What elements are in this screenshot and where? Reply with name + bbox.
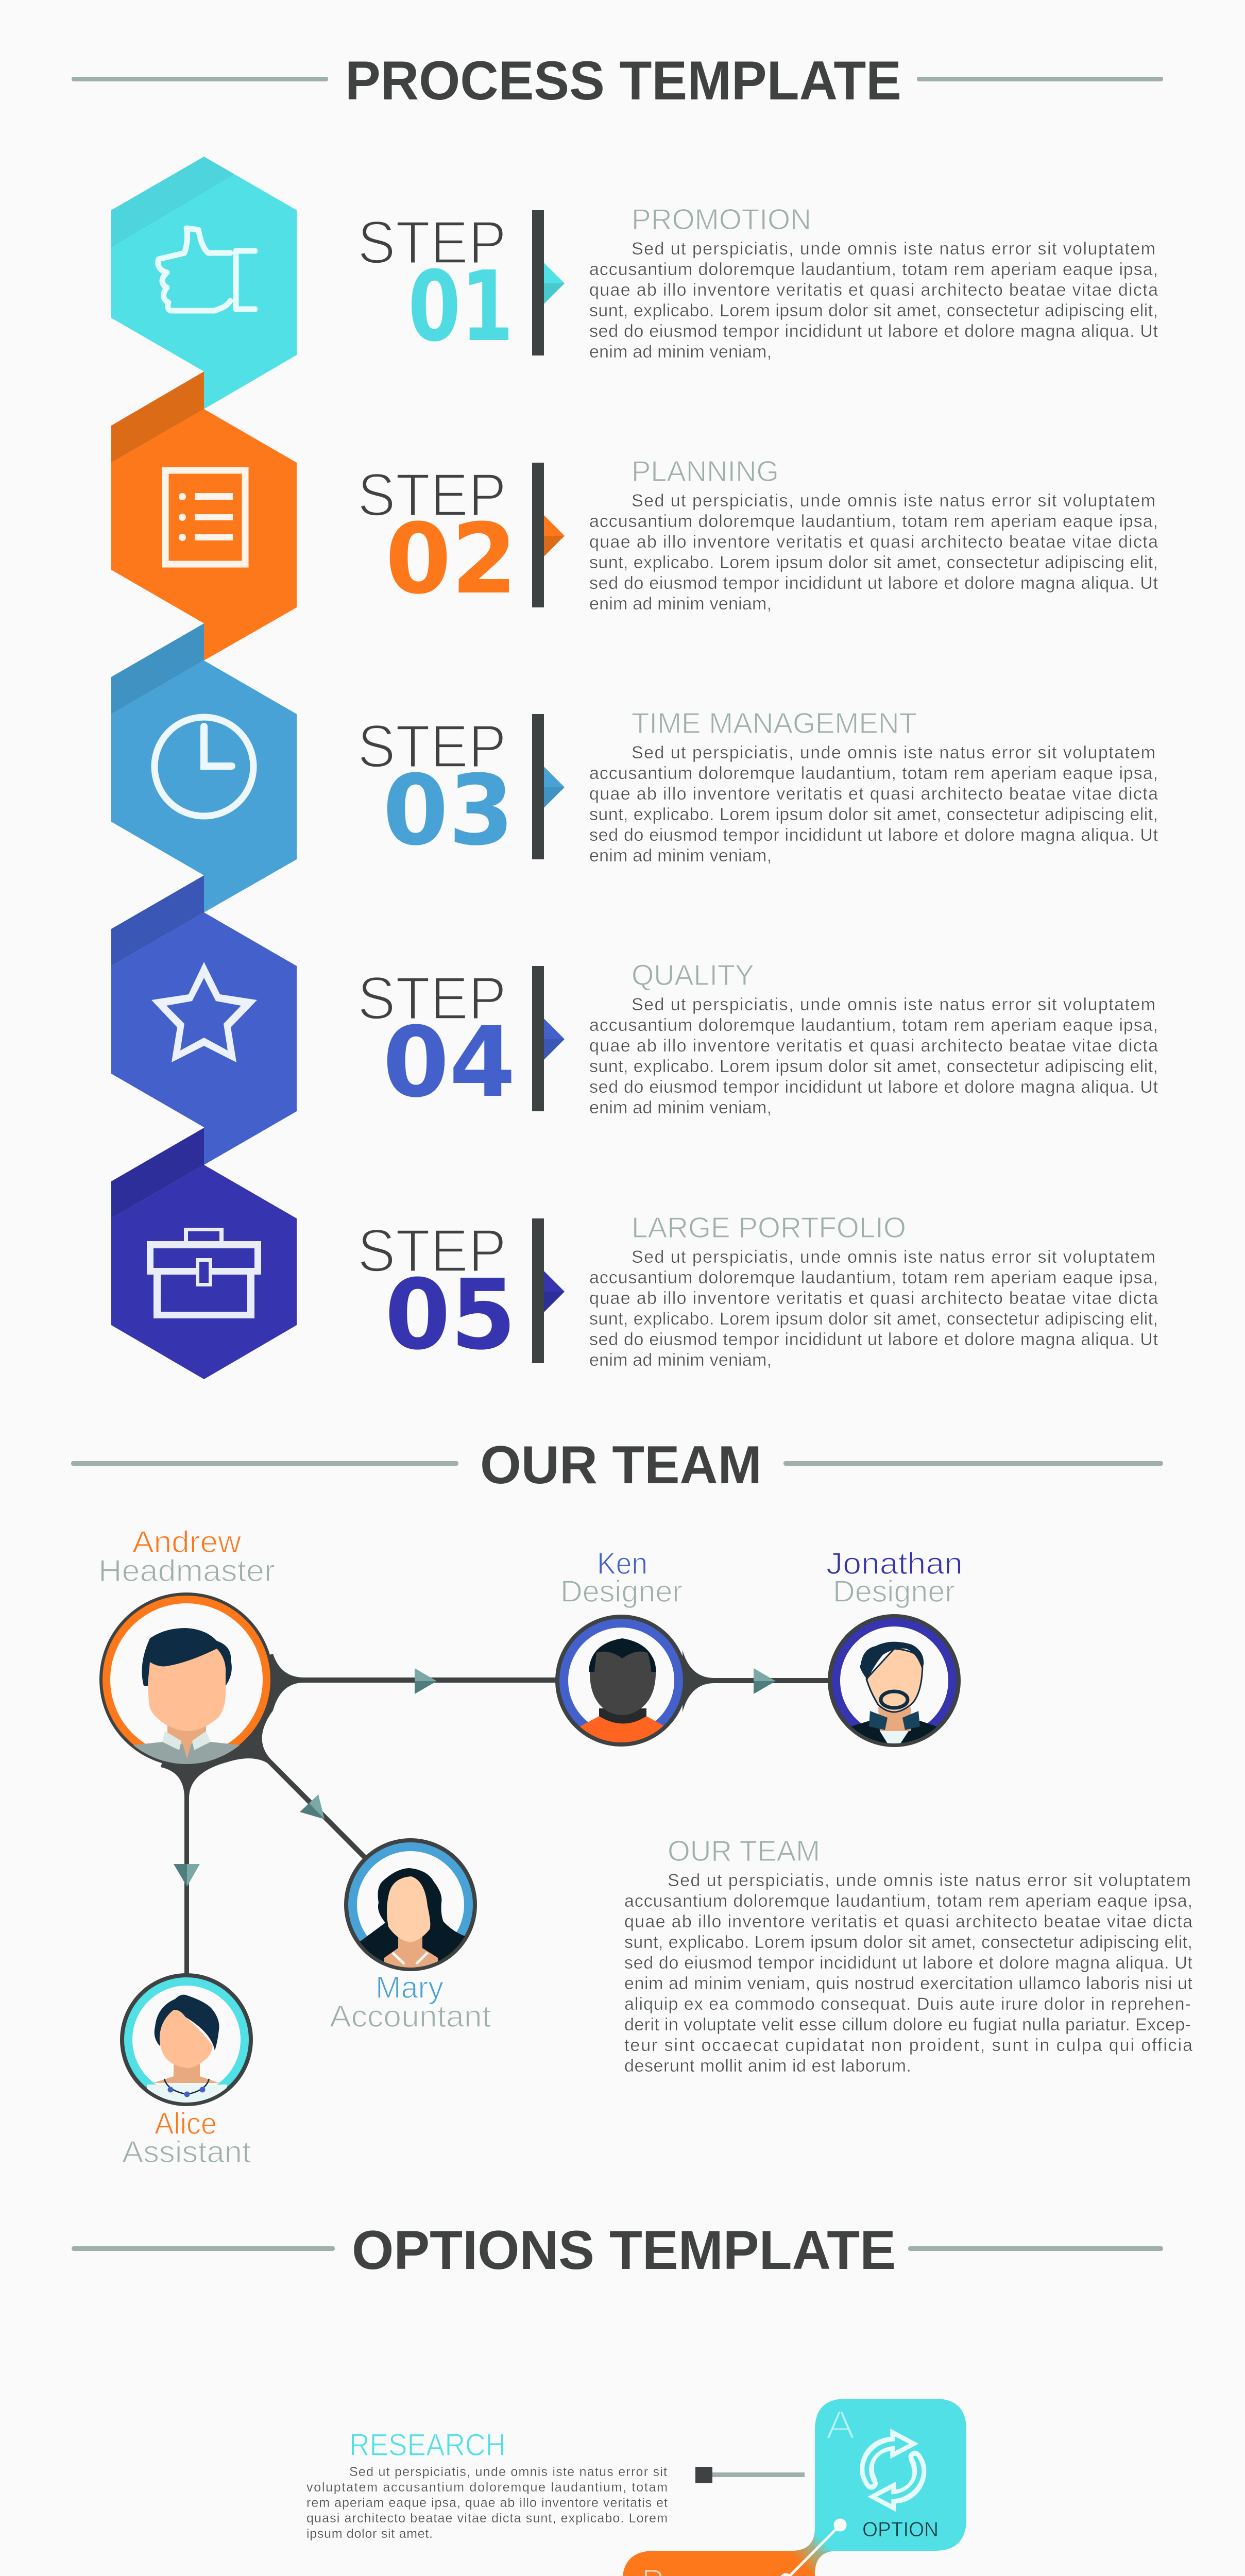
label: Alice, Assistant: Assistant (122, 2135, 251, 2169)
panel: step 1 label (357, 209, 565, 363)
panel: option A: OPTION (862, 2518, 939, 2541)
label: Mary, Accountant: Accountant (330, 1999, 491, 2033)
text block: research: Sed ut perspiciatis, unde omnis iste natus error sit (349, 2465, 667, 2479)
arrow: Andrew to Mary (300, 1794, 325, 1819)
text block: our team (624, 1835, 1193, 2076)
label: Jonathan, Designer (826, 1547, 963, 1608)
text block: quality (589, 959, 1158, 1117)
connector: A to B pins (780, 2518, 847, 2576)
text block: our team: aliquip ex ea commodo consequat. Duis aute irure dolor in reprehen- (624, 1994, 1191, 2014)
panel: step 2 hexagon (111, 371, 297, 660)
text block: quality: QUALITY (632, 959, 754, 992)
text block: research (306, 2428, 668, 2541)
label: Mary, Accountant (330, 1971, 491, 2033)
text block: planning: sunt, explicabo. Lorem ipsum dolor sit amet, consectetur adipiscing elit, (589, 553, 1158, 572)
heading: process template: PROCESS TEMPLATE (345, 49, 901, 111)
junction fillets between option cards (377, 2528, 838, 2576)
text block: planning: Sed ut perspiciatis, unde omnis iste natus error sit voluptatem (632, 491, 1155, 511)
text block: our team: accusantium doloremque laudantium, totam rem aperiam eaque ipsa, (624, 1891, 1192, 1911)
text block: large portfolio: accusantium doloremque laudantium, totam rem aperiam eaque ipsa, (589, 1268, 1158, 1287)
heading: options template (72, 2219, 1163, 2281)
avatar: Mary (344, 1838, 477, 1973)
label: Alice, Assistant: Alice (155, 2107, 217, 2141)
panel: step 4 label (357, 964, 565, 1119)
text block: promotion: PROMOTION (632, 203, 811, 236)
label: Andrew, Headmaster: Andrew (132, 1525, 241, 1559)
panel: option B (622, 2551, 815, 2576)
text block: our team: deserunt mollit anim id est laborum. (624, 2056, 911, 2076)
text block: large portfolio: LARGE PORTFOLIO (632, 1211, 906, 1244)
text block: time management: quae ab illo inventore veritatis et quasi architecto beatae vitae dicta (589, 784, 1158, 804)
text block: time management: TIME MANAGEMENT (632, 707, 917, 740)
icon: checklist document (165, 470, 245, 564)
heading: process template (72, 49, 1163, 111)
text block: promotion: sunt, explicabo. Lorem ipsum dolor sit amet, consectetur adipiscing elit, (589, 301, 1158, 320)
text block: our team: Sed ut perspiciatis, unde omnis iste natus error sit voluptatem (668, 1871, 1191, 1890)
text block: time management (589, 707, 1158, 866)
text block: promotion: sed do eiusmod tempor incididunt ut labore et dolore magna aliqua. Ut (589, 321, 1158, 341)
text block: large portfolio: sed do eiusmod tempor incididunt ut labore et dolore magna aliqua. Ut (589, 1330, 1158, 1349)
label: Mary, Accountant: Mary (376, 1971, 444, 2005)
arrow: Andrew to Ken (415, 1668, 437, 1694)
label: Andrew, Headmaster: Headmaster (98, 1554, 275, 1588)
text block: quality: accusantium doloremque laudantium, totam rem aperiam eaque ipsa, (589, 1015, 1158, 1035)
text block: our team: teur sint occaecat cupidatat non proident, sunt in culpa qui officia (624, 2036, 1192, 2055)
text block: promotion: enim ad minim veniam, (589, 342, 772, 362)
text block: research: rem aperiam eaque ipsa, quae ab illo inventore veritatis et (306, 2496, 668, 2510)
text block: time management: accusantium doloremque laudantium, totam rem aperiam eaque ipsa, (589, 764, 1158, 783)
panel: step 3 label: STEP (357, 713, 506, 781)
panel: step 5 hexagon (111, 1128, 297, 1379)
panel: step 3 hexagon (111, 623, 297, 912)
panel: step 5 label: 05 (385, 1259, 516, 1371)
label: Alice, Assistant (122, 2107, 251, 2169)
heading: our team: OUR TEAM (480, 1435, 762, 1495)
label: Jonathan, Designer: Jonathan (826, 1547, 963, 1581)
panel: step 2 label (357, 461, 565, 616)
text block: time management: sed do eiusmod tempor incididunt ut labore et dolore magna aliqua. Ut (589, 825, 1158, 845)
text block: large portfolio: enim ad minim veniam, (589, 1350, 772, 1370)
text block: our team: OUR TEAM (668, 1835, 820, 1868)
text block: large portfolio: sunt, explicabo. Lorem ipsum dolor sit amet, consectetur adipiscing elit, (589, 1309, 1158, 1329)
text block: our team: quae ab illo inventore veritatis et quasi architecto beatae vitae dicta (624, 1912, 1192, 1931)
text block: promotion (589, 203, 1158, 362)
panel: step 4 label: STEP (357, 964, 506, 1032)
text block: large portfolio: quae ab illo inventore veritatis et quasi architecto beatae vitae dicta (589, 1289, 1158, 1308)
connectors: org chart lines (161, 1650, 832, 1976)
text block: large portfolio (589, 1211, 1158, 1370)
text block: quality: quae ab illo inventore veritatis et quasi architecto beatae vitae dicta (589, 1036, 1158, 1056)
text block: quality: sunt, explicabo. Lorem ipsum dolor sit amet, consectetur adipiscing elit, (589, 1057, 1158, 1076)
icon: star (151, 962, 257, 1062)
arrow: Andrew to Alice (174, 1864, 200, 1887)
text block: time management: sunt, explicabo. Lorem ipsum dolor sit amet, consectetur adipiscing elit, (589, 805, 1158, 824)
text block: our team: sunt, explicabo. Lorem ipsum dolor sit amet, consectetur adipiscing elit, (624, 1933, 1192, 1952)
text block: promotion: Sed ut perspiciatis, unde omnis iste natus error sit voluptatem (632, 239, 1155, 259)
panel: step 3 label: 03 (383, 754, 514, 867)
text block: research: RESEARCH (349, 2428, 506, 2462)
avatar: Alice (120, 1973, 253, 2112)
heading: our team (71, 1435, 1163, 1495)
panel: option A: A (826, 2402, 855, 2447)
avatar: Ken (555, 1615, 687, 1752)
label: Jonathan, Designer: Designer (833, 1574, 955, 1608)
panel: step 1 label: 01 (408, 250, 514, 363)
label: Ken, Designer (560, 1547, 683, 1608)
text block: research: voluptatem accusantium doloremque laudantium, totam (306, 2480, 668, 2495)
label: Andrew, Headmaster (98, 1525, 275, 1588)
text block: time management: enim ad minim veniam, (589, 846, 772, 866)
text block: quality: sed do eiusmod tempor incididunt ut labore et dolore magna aliqua. Ut (589, 1077, 1158, 1097)
text block: quality: Sed ut perspiciatis, unde omnis iste natus error sit voluptatem (632, 995, 1155, 1014)
icon: refresh arrows (860, 2429, 926, 2512)
panel: step 2 label: STEP (357, 461, 506, 529)
text block: planning: quae ab illo inventore veritatis et quasi architecto beatae vitae dicta (589, 532, 1158, 552)
heading: options template: OPTIONS TEMPLATE (352, 2219, 896, 2281)
text block: planning: sed do eiusmod tempor incididunt ut labore et dolore magna aliqua. Ut (589, 573, 1158, 593)
panel: step 4 hexagon (111, 875, 297, 1165)
panel: step 5 label (357, 1217, 565, 1371)
panel: step 1 hexagon (111, 157, 297, 409)
text block: planning: PLANNING (632, 455, 779, 488)
text block: time management: Sed ut perspiciatis, unde omnis iste natus error sit voluptatem (632, 743, 1155, 762)
text block: planning (589, 455, 1158, 614)
text block: our team: sed do eiusmod tempor incididunt ut labore et dolore magna aliqua. Ut (624, 1953, 1193, 1973)
icon: thumbs up (158, 228, 255, 311)
label: Ken, Designer: Designer (560, 1574, 683, 1608)
label: Ken, Designer: Ken (597, 1547, 647, 1581)
panel: option A (815, 2399, 966, 2551)
text block: research: ipsum dolor sit amet. (306, 2527, 433, 2541)
avatar: Andrew (99, 1592, 274, 1772)
panel: step 2 label: 02 (385, 503, 517, 616)
text block: promotion: accusantium doloremque laudantium, totam rem aperiam eaque ipsa, (589, 260, 1158, 279)
text block: promotion: quae ab illo inventore veritatis et quasi architecto beatae vitae dicta (589, 280, 1158, 300)
icon: clock (155, 717, 253, 816)
arrow: Ken to Jonathan (754, 1668, 776, 1694)
panel: step 3 label (357, 713, 565, 867)
text block: our team: enim ad minim veniam, quis nostrud exercitation ullamco laboris nisi ut (624, 1974, 1193, 1993)
text block: planning: accusantium doloremque laudantium, totam rem aperiam eaque ipsa, (589, 512, 1158, 531)
panel: step 1 label: STEP (357, 209, 506, 277)
text block: quality: enim ad minim veniam, (589, 1098, 772, 1117)
panel: step 5 label: STEP (357, 1217, 506, 1285)
text block: planning: enim ad minim veniam, (589, 594, 772, 614)
panel: step 4 label: 04 (383, 1006, 516, 1119)
marker: research (695, 2467, 805, 2483)
avatar: Jonathan (828, 1614, 961, 1752)
text block: our team: derit in voluptate velit esse cillum dolore eu fugiat nulla pariatur. Excep- (624, 2015, 1191, 2035)
text block: large portfolio: Sed ut perspiciatis, unde omnis iste natus error sit voluptatem (632, 1247, 1155, 1267)
text block: research: quasi architecto beatae vitae dicta sunt, explicabo. Lorem (306, 2511, 668, 2526)
icon: briefcase (147, 1228, 261, 1318)
